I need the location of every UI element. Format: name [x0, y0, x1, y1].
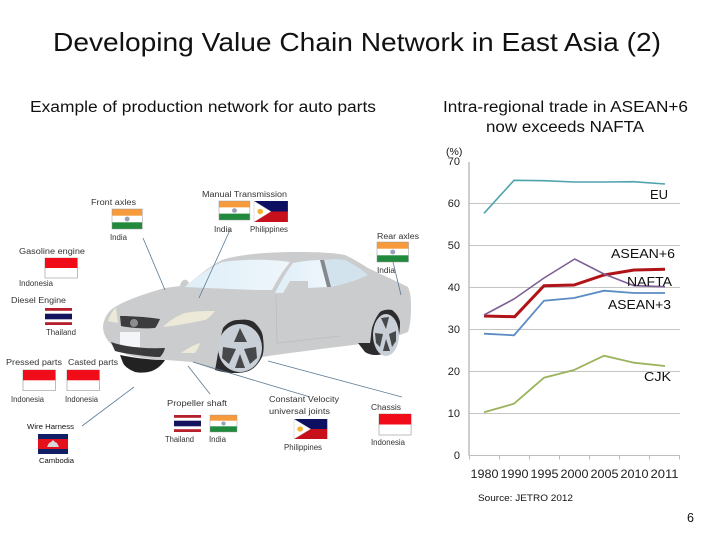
heading: intra-regional trade: now exceeds NAFTA — [486, 119, 645, 136]
parts: gasoline engine: Indonesia — [19, 279, 54, 288]
windshield — [185, 260, 290, 290]
y axis labels: 50 — [448, 240, 460, 252]
x axis labels: 1990 — [500, 467, 529, 481]
y axis labels: 10 — [448, 408, 460, 420]
parts: diesel engine: Diesel Engine — [11, 296, 67, 305]
y axis labels: 20 — [448, 366, 460, 378]
parts: rear axles: Rear axles — [377, 232, 419, 241]
rear wheel — [358, 310, 400, 355]
x axis labels: 2005 — [590, 467, 619, 481]
parts: constant velocity universal joints: universal joints — [269, 407, 330, 416]
series labels: CJK — [644, 369, 671, 384]
parts: diesel engine — [11, 296, 76, 337]
series labels: EU — [650, 187, 668, 202]
x axis labels — [470, 467, 679, 481]
front wheel — [215, 320, 264, 373]
gridlines — [469, 204, 680, 414]
series: NAFTA — [484, 259, 665, 315]
series labels — [608, 187, 675, 384]
series: EU — [484, 180, 665, 213]
icon: Cambodia flag — [38, 434, 68, 454]
car body — [103, 252, 411, 370]
y axis labels: 40 — [448, 282, 460, 294]
heading: production network: Example of production network for auto parts — [30, 99, 376, 116]
x axis labels: 2000 — [560, 467, 589, 481]
parts: constant velocity universal joints: Constant Velocity — [269, 395, 339, 404]
series: CJK — [484, 356, 665, 412]
parts: wire harness: Wire Harness — [27, 424, 75, 431]
parts: propeller shaft: India — [209, 435, 227, 444]
parts: chassis: Chassis — [371, 403, 401, 412]
series labels: ASEAN+6 — [611, 246, 675, 261]
title: Developing Value Chain Network in East Asia (2) — [53, 27, 661, 57]
page number: 6 — [687, 511, 694, 525]
parts: gasoline engine — [19, 247, 86, 288]
line chart: intra-regional trade — [446, 146, 680, 481]
headlights — [108, 308, 118, 323]
parts: front axles: India — [110, 233, 128, 242]
series: ASEAN+3 — [484, 291, 665, 335]
door line — [276, 295, 340, 343]
axes — [469, 162, 680, 460]
heading: intra-regional trade: Intra-regional trade in ASEAN+6 — [443, 99, 688, 116]
parts: constant velocity universal joints — [269, 395, 339, 452]
x axis labels: 1995 — [530, 467, 559, 481]
parts: casted parts: Casted parts — [68, 358, 118, 367]
side windows — [275, 260, 327, 293]
x axis labels: 1980 — [470, 467, 499, 481]
parts: diesel engine: Thailand — [46, 328, 76, 337]
parts: rear axles: India — [377, 266, 396, 275]
car illustration — [103, 252, 411, 373]
headlamp housing — [120, 316, 160, 328]
parts: constant velocity universal joints: Philippines — [284, 443, 322, 452]
y axis labels: 70 — [448, 156, 460, 168]
parts: manual transmission — [202, 190, 288, 234]
series labels: ASEAN+3 — [608, 297, 671, 312]
parts: manual transmission: Manual Transmission — [202, 190, 287, 199]
parts: front axles — [91, 198, 142, 242]
parts: pressed parts — [6, 358, 62, 404]
y axis labels: 60 — [448, 198, 460, 210]
parts: front axles: Front axles — [91, 198, 136, 207]
parts: chassis — [371, 403, 411, 447]
parts: wire harness — [27, 424, 75, 465]
x axis labels: 2010 — [620, 467, 649, 481]
parts: gasoline engine: Gasoline engine — [19, 247, 86, 256]
unit label: (%) — [446, 146, 462, 158]
parts: casted parts — [65, 358, 118, 404]
heading: intra-regional trade — [443, 99, 688, 136]
parts: wire harness: Cambodia — [39, 458, 74, 465]
parts: pressed parts: Indonesia — [11, 395, 45, 404]
series labels: NAFTA — [627, 274, 672, 289]
front grille and bumper — [120, 332, 140, 347]
parts: propeller shaft — [165, 399, 237, 444]
leader lines — [82, 230, 402, 426]
parts: chassis: Indonesia — [371, 438, 406, 447]
parts: propeller shaft: Thailand — [165, 435, 194, 444]
parts: propeller shaft: Propeller shaft — [167, 399, 228, 408]
parts: pressed parts: Pressed parts — [6, 358, 62, 367]
y axis labels — [448, 156, 460, 462]
parts: rear axles — [377, 232, 419, 275]
parts: manual transmission: Philippines — [250, 225, 288, 234]
y axis labels: 0 — [454, 450, 460, 462]
y axis labels: 30 — [448, 324, 460, 336]
parts: casted parts: Indonesia — [65, 395, 99, 404]
series: ASEAN+6 — [484, 269, 665, 317]
x axis labels: 2011 — [650, 467, 679, 481]
parts: manual transmission: India — [214, 225, 233, 234]
source note: Source: JETRO 2012 — [478, 493, 573, 503]
